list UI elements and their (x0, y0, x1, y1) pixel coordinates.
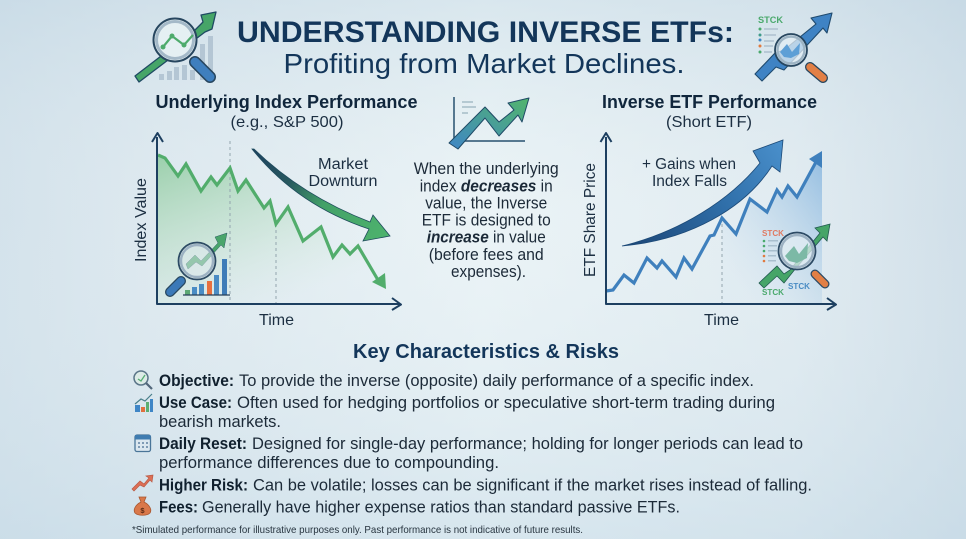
icon: bar chart (135, 394, 153, 412)
item: fees: Generally have higher expense ratios than standard passive ETFs. (202, 498, 680, 516)
item: use case: Often used for hedging portfolios or speculative short-term trading during (237, 393, 775, 412)
icon: rising blue-green arrow (449, 97, 529, 149)
footnote: *Simulated performance for illustrative purposes only. Past performance is not indicative of future results. (132, 524, 583, 536)
text: explanation: (before fees and (429, 246, 544, 264)
arrowhead: index line (372, 273, 386, 289)
text: explanation: When the underlying (414, 160, 559, 178)
icon: magnifier with STCK labels: STCK (762, 287, 785, 297)
subheading: S&P 500: (e.g., S&P 500) (230, 114, 344, 131)
icon: money bag: $ (140, 506, 145, 515)
arrow: market downturn (252, 149, 390, 241)
arrowhead: ETF line (809, 151, 822, 168)
item: fees: Fees: (159, 498, 198, 516)
icon: magnifier with blue arrow, top right: STCK (758, 15, 784, 25)
item: use case: bearish markets. (159, 412, 281, 431)
icon: magnifier with STCK labels: STCK (762, 228, 785, 238)
icon: magnifier with STCK labels: STCK (788, 281, 811, 291)
icon: rising red arrow (132, 475, 153, 491)
chart area fill (722, 155, 822, 304)
label: gains when index falls: + Gains when (642, 156, 736, 173)
line: index decline (158, 155, 378, 280)
icon: magnifier with green arrow, top left (135, 12, 216, 82)
label: gains when index falls: Index Falls (652, 173, 727, 190)
panel: central explanation (414, 97, 563, 281)
icon: money bag (134, 497, 151, 515)
title: Profiting from Market Declines. (284, 48, 684, 79)
text: explanation: ETF is designed to (422, 212, 551, 230)
item: daily reset: performance differences due to compounding. (159, 453, 499, 472)
label: time: Time (704, 312, 739, 329)
title (237, 16, 734, 79)
label: time: Time (259, 312, 294, 329)
icon: magnifier with blue arrow, top right (755, 13, 832, 81)
guide lines (230, 141, 276, 303)
panel: underlying index performance (133, 92, 418, 329)
label: market downturn: Downturn (308, 173, 378, 190)
line: ETF rise (606, 162, 816, 291)
chart area fill (158, 155, 378, 304)
label: market downturn: Market (318, 156, 369, 173)
heading: inverse ETF: Inverse ETF Performance (602, 92, 817, 112)
icon: magnifier with STCK labels (759, 224, 830, 297)
item: higher risk: Can be volatile; losses can be significant if the market rises instead of falling. (253, 476, 812, 494)
panel: key characteristics and risks (132, 341, 812, 536)
heading: key characteristics: Key Characteristics & Risks (353, 341, 619, 363)
item: higher risk: Higher Risk: (159, 476, 248, 494)
text: explanation: index decreases in (420, 178, 554, 196)
heading: underlying index: Underlying Index Performance (156, 92, 418, 112)
text: explanation: value, the Inverse (425, 194, 547, 212)
item: daily reset: Designed for single-day performance; holding for longer periods can lead to (252, 434, 803, 453)
arrow: gains (622, 140, 783, 246)
axes (152, 133, 401, 310)
subheading: short ETF: (Short ETF) (666, 114, 752, 131)
label: index value: Index Value (133, 178, 150, 262)
icon: calendar (135, 435, 150, 452)
text: explanation: increase in value (427, 228, 550, 246)
item: daily reset: Daily Reset: (159, 434, 247, 453)
item: objective: To provide the inverse (opposite) daily performance of a specific index. (239, 371, 754, 390)
item: objective: Objective: (159, 371, 234, 390)
label: ETF share price: ETF Share Price (582, 163, 599, 277)
axes (600, 133, 836, 310)
guide line (721, 218, 723, 303)
title: UNDERSTANDING INVERSE ETFs: (237, 16, 734, 49)
panel: inverse ETF performance (582, 92, 836, 329)
text: explanation: expenses). (451, 263, 526, 281)
icon: magnifier with bars (170, 233, 230, 295)
icon: magnifier (134, 371, 152, 389)
item: use case: Use Case: (159, 393, 232, 412)
